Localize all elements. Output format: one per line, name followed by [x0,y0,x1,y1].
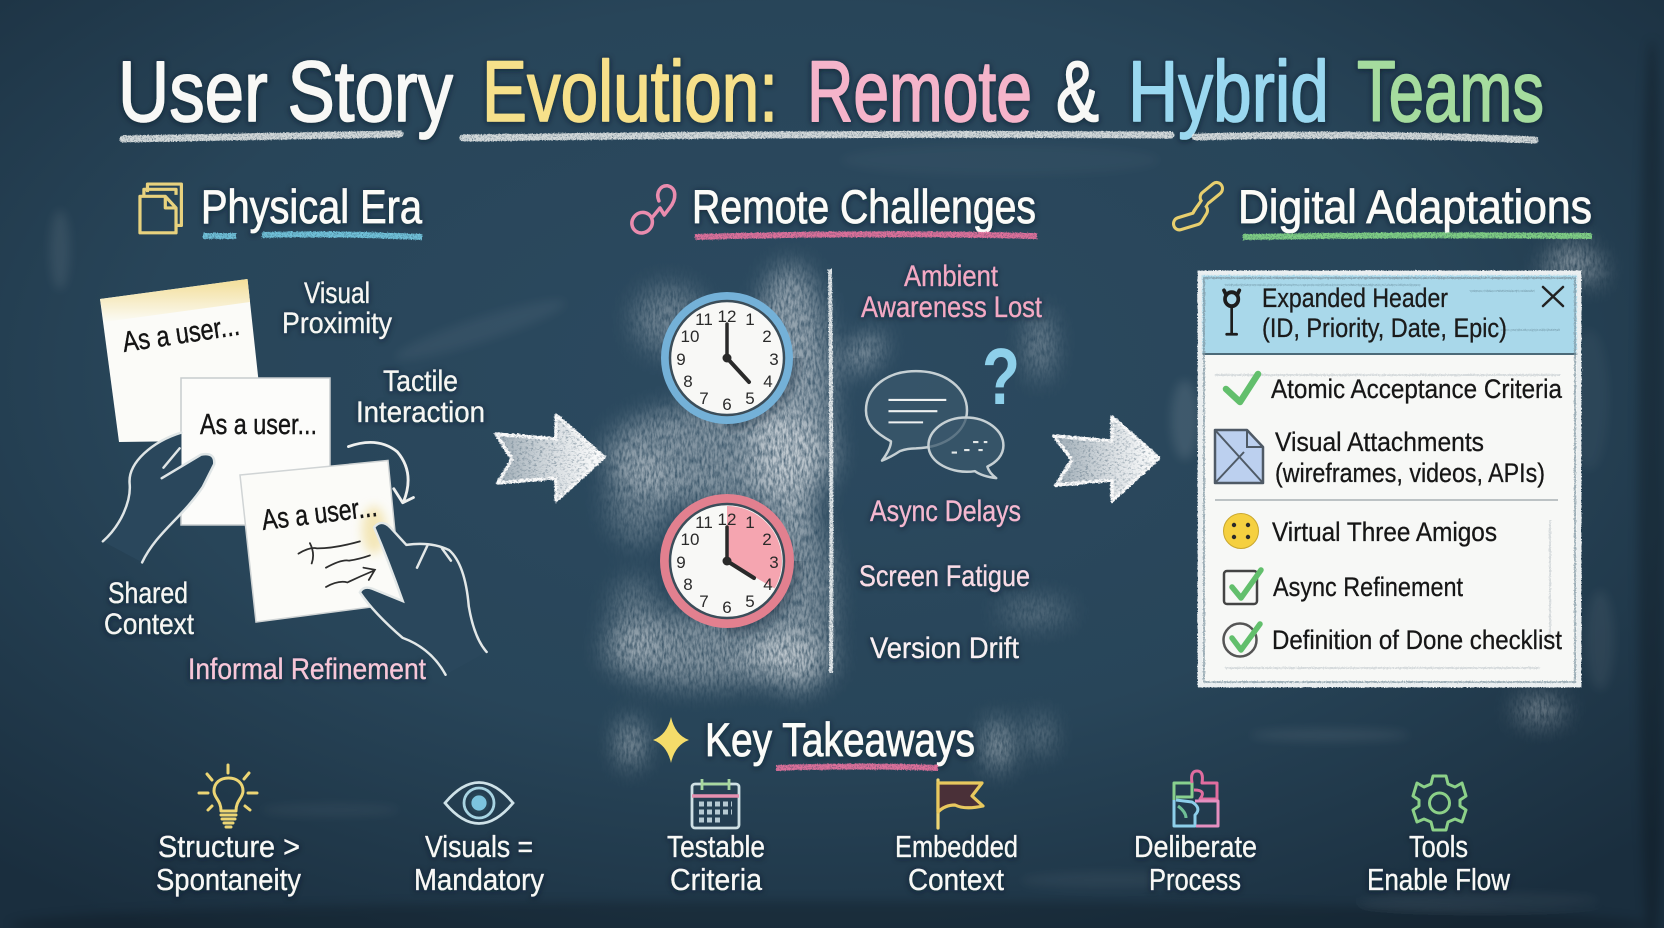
item: definition of done checklist: Definition of Done checklist [1272,625,1562,655]
remote challenge labels: Screen Fatigue [859,560,1030,593]
note 3 [240,460,402,622]
heading: remote challenges: Remote Challenges [692,180,1036,233]
clock: pink: 1 [745,513,755,532]
item: virtual three amigos [1224,514,1497,548]
note 2: As a user... [200,409,317,441]
heading: digital adaptations: Digital Adaptations [1238,180,1592,233]
clock: blue: 12 [718,307,736,326]
takeaway: testable criteria: Testable [667,829,765,864]
story card [1198,271,1581,687]
arrow: physical to remote [496,415,604,501]
takeaway: structure: Structure > [158,829,300,864]
panel: physical era [100,180,487,686]
curved arrow [348,442,413,503]
item: visual attachments: Visual Attachments [1275,427,1484,457]
clock: blue: 7 [699,389,709,408]
takeaway: tools enable flow: Tools [1409,829,1468,864]
remote challenge labels [859,260,1043,665]
icon: gear [1413,776,1466,830]
clock: blue: 8 [683,372,693,391]
physical era labels: Visual [304,277,370,310]
clock: pink: 11 [695,513,713,532]
title: Remote [807,44,1032,140]
clock: pink [654,488,800,634]
clock: blue: 1 [745,310,755,329]
expanded header text: Expanded Header [1262,283,1448,313]
icon: speech bubbles with question mark [866,332,1020,478]
takeaway: structure: Spontaneity [156,862,301,897]
item: virtual three amigos: Virtual Three Amigos [1272,517,1497,547]
takeaway: embedded context: Context [908,862,1004,897]
physical era labels: Interaction [356,396,485,429]
takeaway: testable criteria: Criteria [670,862,763,897]
title: Teams [1357,44,1544,140]
clock: blue: 9 [676,350,686,369]
takeaway: structure [156,765,301,897]
icon: puzzle pieces [1174,771,1218,826]
clock: pink: 10 [681,530,699,549]
note 2 [181,378,330,525]
remote challenge labels: Ambient [904,260,999,293]
item: atomic acceptance criteria: Atomic Acceptance Criteria [1271,374,1563,404]
vertical divider [830,269,831,673]
icon: chain link [1179,189,1217,224]
icon: stacked documents [140,184,181,233]
item: async refinement: Async Refinement [1273,572,1463,602]
takeaway: visuals: Visuals = [425,829,533,864]
chalk smear behind clocks [605,241,1599,769]
item: async refinement [1224,570,1463,604]
takeaway: tools enable flow: Enable Flow [1367,862,1511,897]
title [118,44,1544,140]
icon: flag [938,780,983,828]
icon: speech bubbles with question mark: ? [982,332,1020,421]
note 1 [100,279,265,442]
icon: calendar [692,779,739,828]
remote challenge labels: Version Drift [870,632,1020,665]
item: visual attachments [1215,427,1545,488]
icon: light bulb [199,765,257,827]
clock: blue: 10 [681,327,699,346]
title: & [1056,44,1099,140]
expanded header text [1262,283,1507,343]
heading underline: key takeaways [776,766,938,768]
heading underline: digital adaptations [1243,235,1592,237]
takeaway: deliberate process [1134,771,1257,897]
title underline [123,134,1535,140]
hand right [360,523,487,675]
clock: blue [655,286,799,430]
physical era labels: Proximity [282,307,392,340]
title: Evolution: [482,44,778,140]
clock: blue: 3 [769,350,779,369]
clock: pink: 6 [722,598,732,617]
physical era labels: Context [104,608,195,641]
heading underline: remote challenges [695,234,1037,237]
clock: blue: 5 [745,389,755,408]
title: Hybrid [1128,44,1329,140]
scribbles [298,541,375,587]
clock: blue: 6 [722,395,732,414]
takeaway: embedded context: Embedded [895,829,1018,864]
clock: pink: 12 [718,510,736,529]
expanded header text: (ID, Priority, Date, Epic) [1262,313,1507,343]
panel: remote challenges [628,180,1043,673]
takeaway: visuals [414,782,544,897]
takeaway: visuals: Mandatory [414,862,544,897]
panel: digital adaptations [1179,180,1592,687]
arrow: remote to digital [1054,417,1159,501]
clock: pink: 4 [763,575,773,594]
panel: key takeaways [156,713,1511,897]
icon: sparkle star [653,717,689,763]
heading underline: physical era [203,234,422,237]
takeaway: deliberate process: Process [1149,862,1241,897]
takeaway: embedded context [895,780,1018,897]
clock: blue: 2 [762,327,772,346]
remote challenge labels: Awareness Lost [861,291,1043,324]
takeaway: deliberate process: Deliberate [1134,829,1257,864]
takeaway: testable criteria [667,779,765,897]
note 3: As a user... [260,491,379,537]
takeaway: tools enable flow [1367,776,1511,897]
clock: blue: 11 [695,310,713,329]
icon: close x [1543,287,1563,306]
clock: pink: 3 [769,553,779,572]
icon: eye [445,782,513,824]
note 1: As a user... [120,310,242,359]
remote challenge labels: Async Delays [870,495,1021,528]
physical era labels: Tactile [383,365,458,398]
physical era labels: Shared [108,577,188,610]
clock: pink: 7 [699,592,709,611]
clock: pink: 5 [745,592,755,611]
sticky notes [100,279,402,622]
heading: key takeaways: Key Takeaways [705,713,975,766]
clock: pink: 9 [676,553,686,572]
clock: pink: 2 [762,530,772,549]
icon: header pin [1224,290,1239,334]
physical era labels [104,277,485,686]
physical era labels: Informal Refinement [188,653,427,686]
hand left [103,433,214,562]
clock: blue: 4 [763,372,773,391]
heading: physical era: Physical Era [201,180,423,233]
clock: pink: 8 [683,575,693,594]
item: visual attachments: (wireframes, videos, APIs) [1275,458,1545,488]
title: User Story [118,44,453,140]
icon: broken link [628,186,675,237]
